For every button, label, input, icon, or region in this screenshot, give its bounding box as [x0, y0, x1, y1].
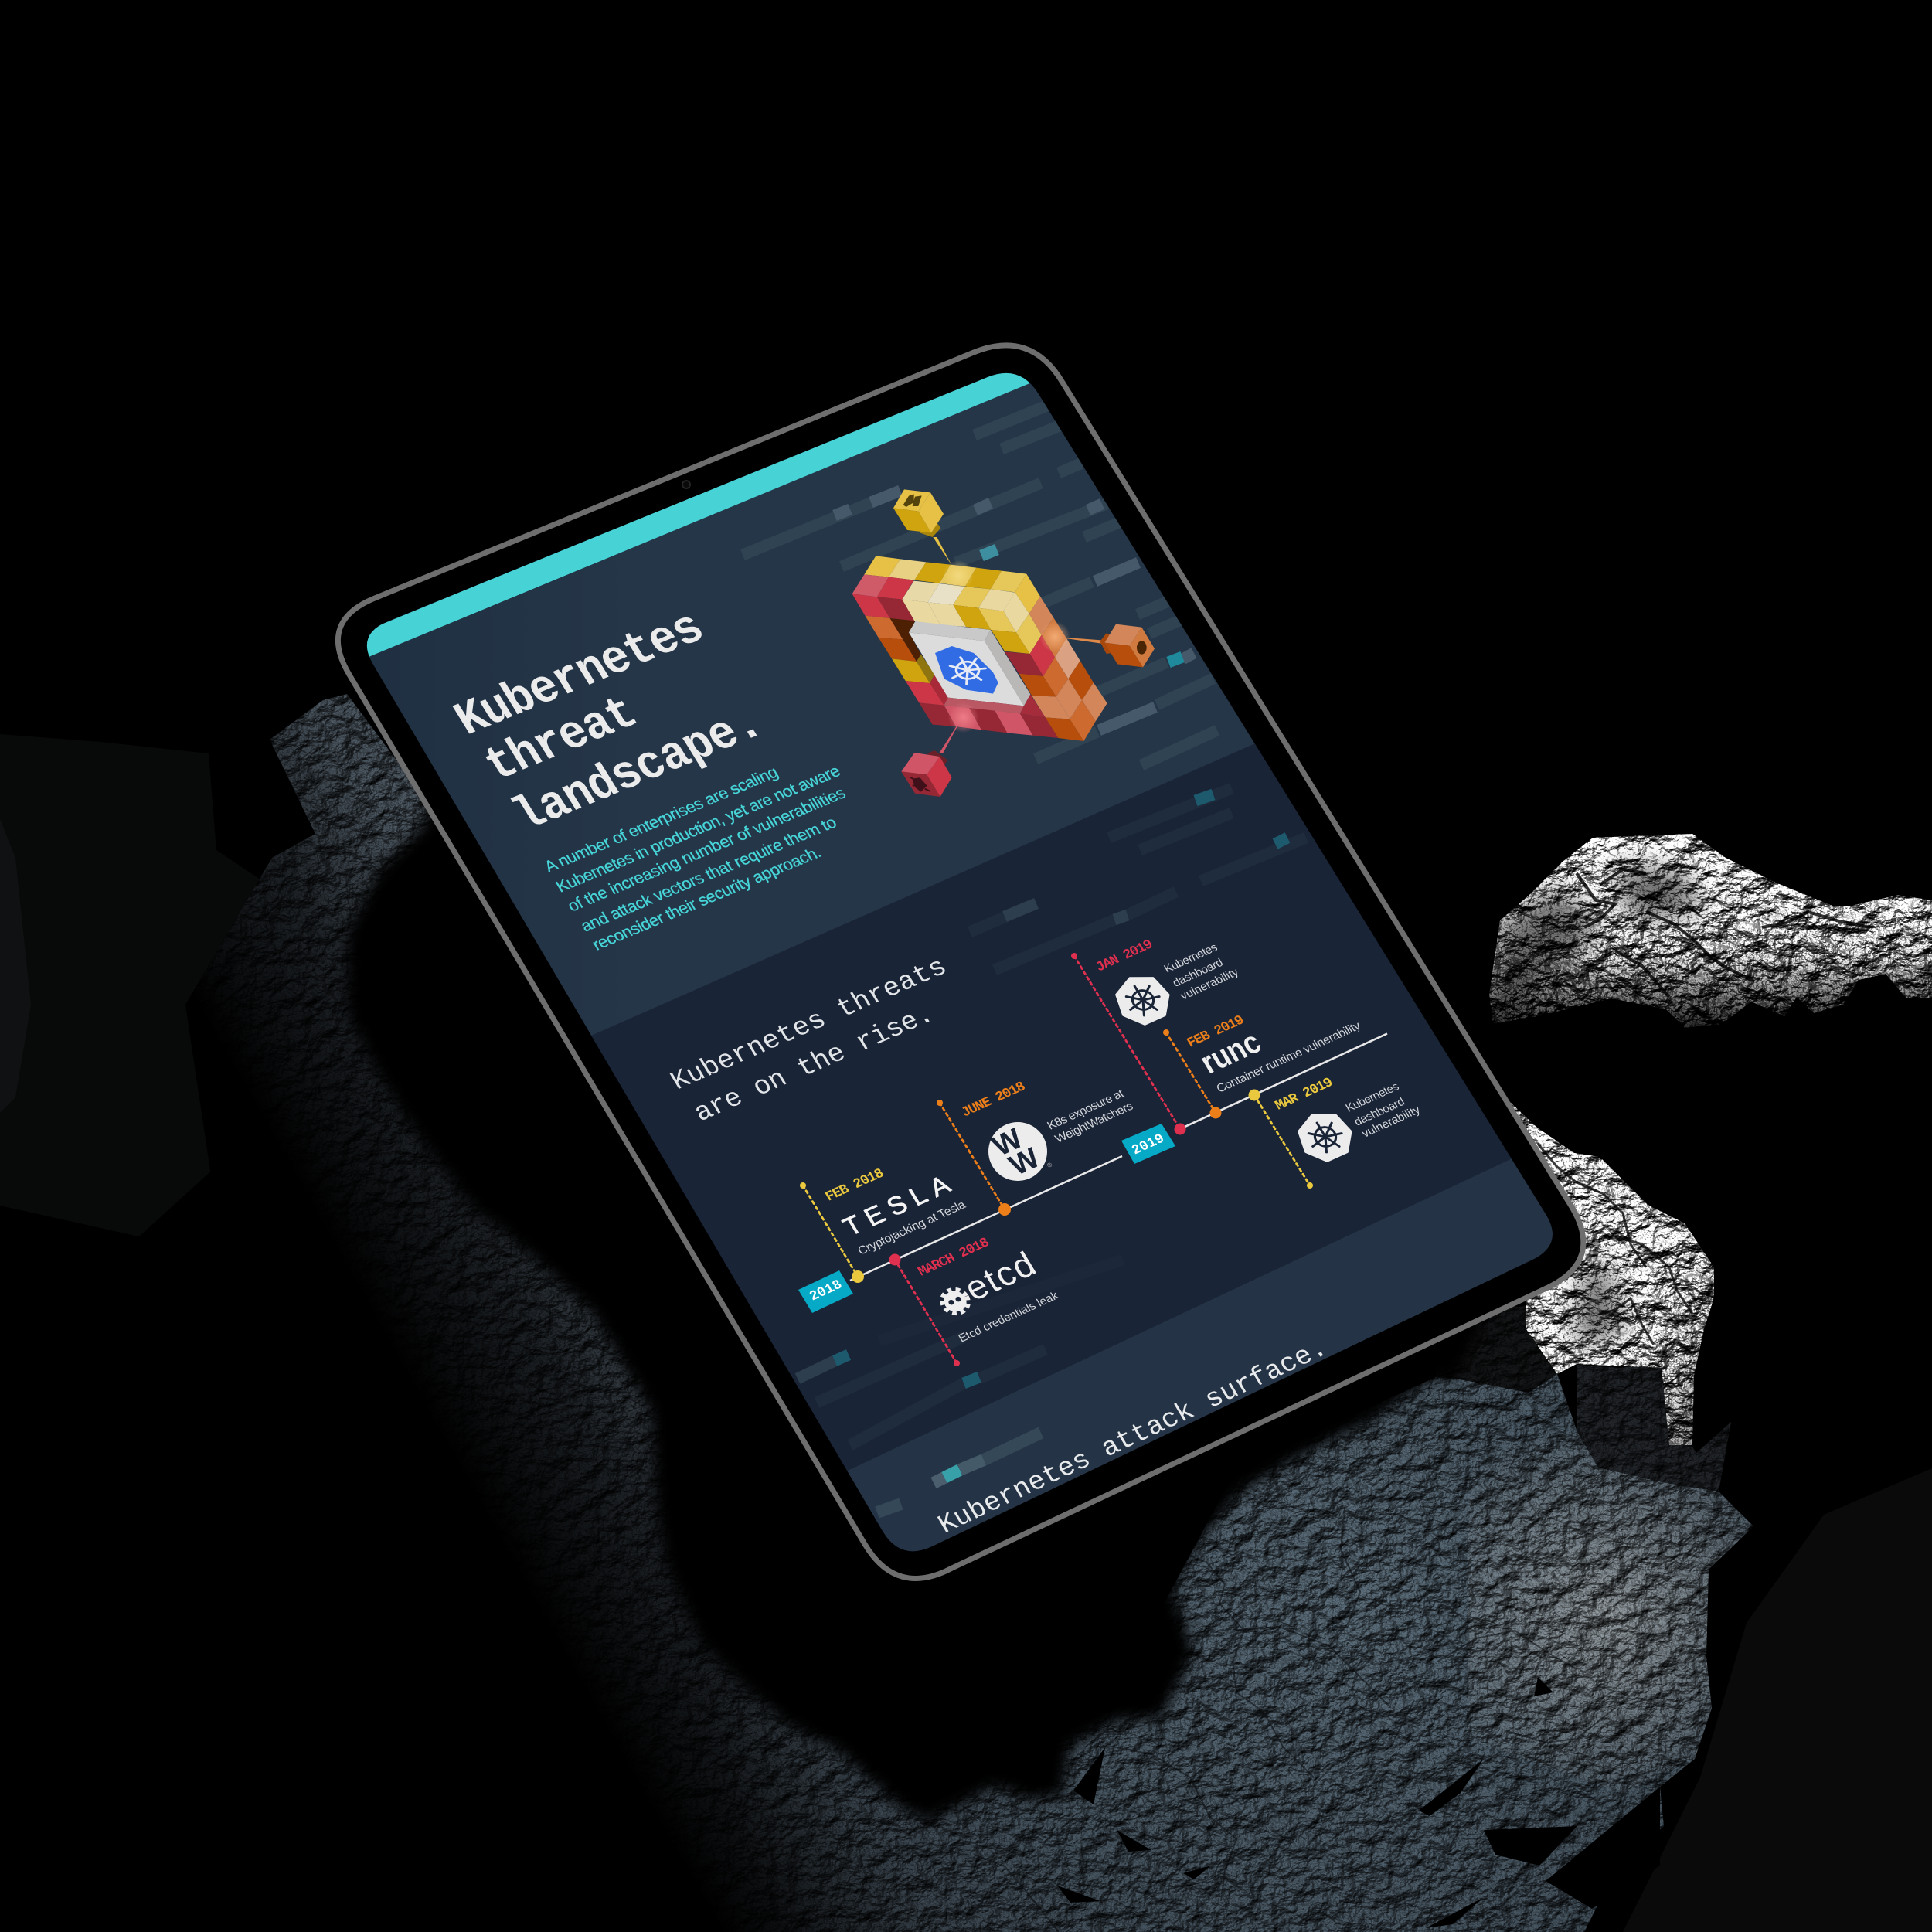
kubernetes logo on panel — [935, 646, 998, 694]
year tag 2018 — [798, 1270, 853, 1313]
attack surface section background — [835, 1154, 1623, 1623]
teal bars — [981, 549, 997, 556]
year tag 2019: 2019 — [1129, 1131, 1168, 1158]
intro paragraph — [541, 762, 849, 954]
paragraph line 3: of the increasing number of vulnerabilities — [564, 784, 849, 915]
date labels — [823, 937, 1336, 1280]
logo: Tesla: TESLA — [838, 1170, 955, 1242]
date: Feb 2018: FEB 2018 — [823, 1166, 887, 1205]
caption: Jan 2019: Kubernetes — [1162, 941, 1219, 975]
connector end dots — [800, 953, 1313, 1366]
timeline axis 2019 — [1175, 1034, 1387, 1131]
yellow cube with bell icon — [893, 489, 944, 537]
dotted connectors — [803, 956, 1310, 1363]
left column tiles — [852, 594, 944, 706]
title line 2: threat — [474, 687, 648, 794]
date: March 2018: MARCH 2018 — [916, 1235, 992, 1280]
cracks on boulder — [974, 1507, 1615, 1932]
background code bars, attack section — [877, 1433, 1041, 1512]
connector: red — [939, 717, 962, 753]
caption: WeightWatchers: WeightWatchers — [1053, 1100, 1136, 1145]
timeline node dots — [852, 1090, 1260, 1283]
ridge shade left — [1495, 889, 1600, 1020]
screen — [366, 372, 1553, 1552]
bottom row tiles — [919, 702, 1083, 741]
connector: yellow — [933, 537, 952, 566]
glow: red node — [948, 702, 979, 733]
ridge shade centre — [1615, 866, 1700, 920]
teal dim bars — [835, 794, 1287, 1383]
inner cavity walls — [890, 618, 948, 706]
screen top section background — [366, 372, 1553, 1552]
logo: WeightWatchers: W — [1004, 1142, 1046, 1182]
caption: etcd: Etcd credentials leak — [956, 1289, 1061, 1345]
facets on boulder — [1057, 1677, 1660, 1928]
caption: Mar 2019: vulnerability — [1359, 1104, 1423, 1140]
isometric voxel illustration — [852, 489, 1155, 797]
orange cube with devil icon — [1100, 624, 1155, 667]
date: Jan 2019: JAN 2019 — [1094, 937, 1156, 975]
date: June 2018: JUNE 2018 — [959, 1080, 1029, 1121]
caption: Jan 2019: dashboard — [1170, 956, 1226, 989]
caption: WeightWatchers: K8s exposure at — [1045, 1087, 1127, 1132]
cracks on upper ridge — [1577, 869, 1870, 997]
title line 3: landscape. — [503, 697, 774, 844]
rock: far-left edge — [0, 819, 31, 1113]
rocks: soft textured boulders — [185, 694, 1753, 1932]
bright teal bar — [1168, 657, 1182, 662]
red cube with bug icon — [901, 750, 952, 797]
faintest bar — [879, 1260, 1123, 1341]
connector: Feb 2019 — [1166, 1032, 1216, 1113]
heading line 2: are on the rise. — [689, 999, 940, 1128]
voxel ring — [852, 556, 1107, 741]
section heading: attack surface: Kubernetes attack surface. — [933, 1333, 1333, 1540]
lighter bar — [934, 1478, 944, 1483]
icon: kubernetes badge Mar 2019 — [1290, 1104, 1359, 1167]
top row tiles — [852, 556, 1026, 611]
date: Mar 2019: MAR 2019 — [1273, 1075, 1336, 1114]
header teal band — [366, 372, 1030, 657]
logo: etcd gear — [937, 1286, 973, 1317]
tablet shadow on rocks — [347, 386, 1507, 1822]
white center panel — [909, 621, 1046, 717]
yellow front faces — [902, 574, 1042, 654]
rock: upper right ridge — [1489, 834, 1932, 1028]
rock: cavity behind boulder — [1577, 1364, 1731, 1492]
rocks: faint unlit masses — [0, 734, 1932, 1932]
timeline axis 2018 — [850, 1156, 1122, 1281]
lighter dim bars — [798, 903, 1128, 1379]
tablet — [335, 342, 1586, 1581]
heading line 1: Kubernetes threats — [665, 952, 953, 1097]
year tag 2019 — [1121, 1124, 1175, 1164]
rock: left lit band — [185, 694, 1159, 1932]
caption: Mar 2019: Kubernetes — [1343, 1080, 1401, 1114]
icon: kubernetes badge Jan 2019 — [1107, 968, 1177, 1030]
camera — [682, 481, 690, 488]
logo: WeightWatchers: ® — [1046, 1162, 1053, 1169]
connector: Mar 2019 — [1254, 1095, 1310, 1185]
mid bar — [960, 1460, 984, 1470]
glow: orange node — [1039, 621, 1070, 652]
caption: Tesla: Cryptojacking at Tesla — [855, 1199, 968, 1257]
connector: Feb 2018 — [803, 1185, 858, 1277]
teal bar — [944, 1470, 960, 1478]
caption: Mar 2019 — [1343, 1080, 1423, 1140]
rock: faint far-left boulders — [0, 734, 263, 1236]
dim bars — [817, 788, 1306, 1445]
connector: Jan 2019 — [1074, 956, 1180, 1129]
tablet body and bezel — [338, 345, 1583, 1578]
timeline — [798, 937, 1423, 1366]
section heading: threats on the rise — [665, 952, 953, 1128]
paragraph line 5: reconsider their security approach. — [589, 843, 825, 954]
caption: runc: Container runtime vulnerability — [1214, 1019, 1363, 1095]
logo: etcd wordmark: etcd — [957, 1244, 1043, 1308]
dim bars — [877, 1433, 1041, 1512]
paragraph line 1: A number of enterprises are scaling — [541, 763, 781, 876]
title — [445, 602, 774, 844]
right column tiles — [1005, 597, 1107, 741]
rock: neutral lit boulder flank — [1468, 1432, 1753, 1793]
year tag 2018: 2018 — [807, 1277, 845, 1304]
dark blotches on bright rocks — [1495, 866, 1700, 1349]
paragraph line 4: and attack vectors that require them to — [577, 813, 840, 935]
background code bars, upper section — [743, 405, 1217, 765]
paragraph line 2: Kubernetes in production, yet are not aware — [553, 762, 844, 896]
connector: June 2018 — [940, 1103, 1005, 1209]
glow: yellow node — [943, 560, 974, 591]
date: Feb 2019: FEB 2019 — [1185, 1013, 1247, 1051]
logo: WeightWatchers — [987, 1122, 1053, 1182]
outcrop shade — [1577, 1267, 1623, 1349]
threats section dark background — [572, 738, 1522, 1477]
caption: Mar 2019: dashboard — [1352, 1095, 1407, 1128]
rocks: bright hard-lit rocks — [1489, 834, 1932, 1445]
cracks on outcrop — [1538, 1144, 1692, 1345]
rock: lower right outcrop — [1509, 1101, 1714, 1445]
darker bars — [743, 405, 1217, 765]
background code bars, dark section — [798, 788, 1306, 1445]
connector: March 2018 — [895, 1260, 957, 1363]
title line 1: Kubernetes — [445, 602, 715, 748]
rock: right-hand dim mass — [1623, 1468, 1932, 1932]
rock: shaded patch under tablet — [1436, 1306, 1557, 1393]
logo: runc: runc — [1193, 1024, 1267, 1080]
rock cracks and dark facets — [974, 869, 1870, 1932]
lighter bars — [835, 491, 1194, 730]
caption: Jan 2019: vulnerability — [1178, 966, 1241, 1002]
logo: WeightWatchers: W — [987, 1123, 1029, 1162]
caption: Jan 2019 — [1162, 941, 1241, 1002]
connector: orange — [1055, 637, 1101, 644]
rock: main boulder — [696, 1374, 1753, 1932]
